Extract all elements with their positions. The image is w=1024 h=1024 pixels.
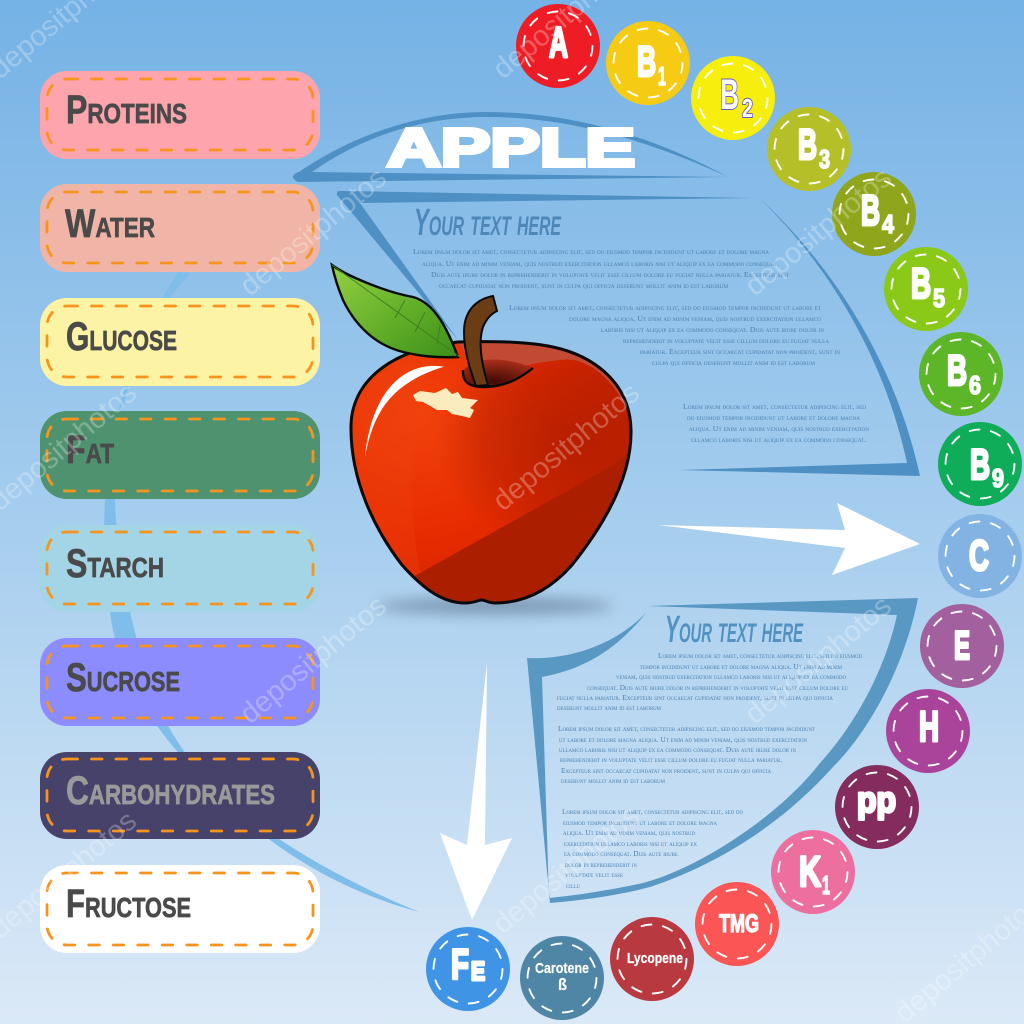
vitamin E: E [954, 624, 970, 668]
upper panel text 3 [683, 402, 869, 444]
upper panel text 2: Lorem ipsum dolor sit amet, consectetur adipiscing elit, sed do eiusmod tempor incididunt ut labore et [509, 303, 821, 312]
apple highlight [365, 366, 445, 457]
label: water [40, 184, 320, 272]
vitamin B3 [767, 107, 851, 191]
vitamin E [920, 604, 1004, 688]
upper panel text 2: laboris nisi ut aliquip ex ea commodo consequat. Duis aute irure dolor in [601, 325, 824, 334]
label: sucrose [40, 638, 320, 726]
vitamin B1: 1 [658, 61, 666, 91]
upper panel text 3: aliqua. Ut enim ad minim veniam, quis nostrud exercitation [689, 424, 869, 433]
background arc behind labels [104, 272, 419, 912]
upper panel text 2: dolore magna aliqua. Ut enim ad minim veniam, quis nostrud exercitation ullamco [569, 314, 821, 323]
apple shadow [377, 598, 613, 614]
upper panel text 1 [413, 247, 789, 290]
watermarks: depositphotos [487, 800, 646, 940]
lycopene: Lycopene [627, 950, 683, 967]
apple dimple edge [463, 368, 533, 387]
mineral Fe [426, 927, 510, 1011]
lower panel text 2: deserunt mollit anim id est laborum [561, 776, 666, 785]
vitamin C [938, 514, 1022, 598]
carotene beta [520, 936, 604, 1020]
vitamin B9: B [970, 441, 990, 489]
upper panel text 1: occaecat cupidatat non proident, sunt in culpa qui officia deserunt mollit anim id est laborum [439, 281, 729, 290]
vitamin B2 [691, 56, 775, 140]
vitamin B4: B [861, 187, 880, 235]
vitamin PP [835, 765, 919, 849]
watermarks: depositphotos [487, 377, 646, 517]
label: starch: Starch [66, 542, 164, 586]
apple glare [413, 388, 478, 418]
lower panel text 1: consequat. Duis aute irure dolor in reprehenderit in voluptate velit esse cillum dolore eu [587, 683, 848, 692]
label: fat [40, 411, 320, 499]
upper panel text 2: reprehenderit in voluptate velit esse cillum dolore eu fugiat nulla [623, 336, 829, 345]
vitamin B3: B [798, 121, 817, 169]
upper panel text 1: Duis aute irure dolor in reprehenderit in voluptate velit esse cillum dolore eu fugiat nulla pariatur. Excepteur sint [431, 270, 789, 279]
lower panel text 1: tempor incididunt ut labore et dolore magna aliqua. Ut enim ad minim [640, 662, 843, 671]
vitamin B2: 2 [742, 93, 753, 123]
label: starch [40, 525, 320, 612]
lower panel text 3: eiusmod tempor incididunt ut labore et dolore magna [563, 818, 717, 827]
lower panel text 3: aliqua. Ut enim ad minim veniam, quis nostrud [563, 828, 695, 837]
vitamin B1: B [637, 38, 656, 86]
lower panel text 3 [562, 807, 743, 890]
TMG: TMG [719, 910, 759, 938]
watermarks: depositphotos [234, 162, 393, 302]
lower panel text 2: ullamco laboris nisi ut aliquip ex ea commodo consequat. Duis aute irure dolor in [559, 745, 796, 754]
lower panel text 3: voluptate velit esse [565, 870, 623, 879]
upper panel text 2: culpa qui officia deserunt mollit anim id est laborum [652, 358, 816, 367]
upper panel text 2 [509, 303, 840, 367]
vitamin B9 [938, 422, 1022, 506]
label: sucrose: Sucrose [66, 656, 180, 700]
lower panel text 1 [557, 651, 862, 712]
watermarks: depositphotos [234, 590, 393, 730]
title: APPLE [387, 118, 635, 178]
vitamin B6: 6 [969, 370, 981, 400]
vitamin K1: 1 [822, 870, 830, 900]
lower panel text 2: reprehenderit in voluptate velit esse cillum dolore eu fugiat nulla pariatur. [560, 755, 782, 764]
vitamin A [516, 4, 600, 88]
label: proteins: Proteins [66, 88, 187, 132]
vitamin B4: 4 [882, 209, 894, 239]
label: fat: Fat [66, 428, 114, 472]
vitamin B5: B [911, 260, 931, 308]
lower panel text 2: Lorem ipsum dolor sit amet, consectetur adipiscing elit, sed do eiusmod tempor incididunt [558, 724, 815, 733]
vitamin B6 [919, 332, 1003, 416]
label: fructose: Fructose [66, 882, 191, 926]
vitamin B1 [606, 21, 690, 105]
vitamin B2: B [720, 71, 739, 119]
lower text panel frame [527, 598, 918, 903]
lycopene [610, 917, 694, 1001]
label: water: Water [65, 202, 155, 246]
vitamin B4 [832, 172, 916, 256]
upper panel text 3: ullamco laboris nisi ut aliquip ex ea commodo consequat. [691, 435, 866, 444]
label: carbohydrates [40, 752, 320, 839]
apple dimple [463, 359, 533, 387]
lower panel text 3: cillu [566, 881, 580, 890]
title frame [292, 112, 728, 182]
arrow: right to vitamins [658, 503, 920, 575]
upper panel heading: Your text here [414, 202, 562, 244]
apple stem [464, 296, 497, 386]
lower panel text 3: ea commodo consequat. Duis aute irure [564, 849, 678, 858]
watermarks: depositphotos [739, 590, 898, 730]
upper text panel frame [337, 191, 920, 476]
icon: apple [332, 265, 665, 614]
lower panel heading: Your text here [665, 609, 804, 651]
lower panel text 2: ut labore et dolore magna aliqua. Ut enim ad minim veniam, quis nostrud exercitation [559, 735, 807, 744]
vitamin H [886, 689, 970, 773]
lower panel text 3: dolor in reprehenderit in [565, 860, 637, 869]
mineral Fe: F [451, 941, 469, 989]
upper panel text 3: Lorem ipsum dolor sit amet, consectetur adipiscing elit, sed [683, 402, 866, 411]
apple body [352, 343, 630, 602]
lower panel text 1: fugiat nulla pariatur. Excepteur sint occaecat cupidatat non proident, sunt in culpa qui officia [557, 693, 833, 702]
vitamin H: H [919, 703, 939, 751]
vitamin K1 [771, 830, 855, 914]
arrow: down to minerals [440, 663, 512, 920]
vitamin B9: 9 [992, 463, 1004, 493]
vitamin PP: pp [857, 779, 896, 820]
lower panel text 3: Lorem ipsum dolor sit amet, consectetur adipiscing elit, sed do [562, 807, 743, 816]
carotene beta: ß [558, 975, 567, 994]
lower panel text 1: veniam, quis nostrud exercitation ullamco laboris nisi ut aliquip ex ea commodo [616, 672, 846, 681]
lower panel text 3: exercitation ullamco laboris nisi ut aliquip ex [564, 839, 697, 848]
vitamin B3: 3 [819, 144, 830, 174]
mineral Fe: E [471, 956, 485, 986]
vitamin B5 [884, 247, 968, 331]
lower panel text 1: Lorem ipsum dolor sit amet, consectetur adipiscing elit, sed do eiusmod [658, 651, 862, 660]
upper panel text 2: pariatur. Excepteur sint occaecat cupidatat non proident, sunt in [640, 347, 840, 356]
leaf [332, 265, 460, 357]
lower panel text 2: Excepteur sint occaecat cupidatat non proident, sunt in culpa qui officia [561, 766, 771, 775]
upper panel text 3: do eiusmod tempor incididunt ut labore et dolore magna [687, 413, 860, 422]
vitamin C: C [969, 532, 989, 580]
label: glucose [40, 298, 320, 386]
vitamin A: A [549, 19, 568, 67]
lower panel text 2 [558, 724, 815, 785]
label: proteins [40, 71, 320, 159]
label: fructose [40, 865, 320, 953]
label: carbohydrates: Carbohydrates [66, 769, 275, 813]
watermarks: depositphotos [739, 162, 898, 302]
carotene beta: Carotene [535, 960, 589, 977]
lower panel text 1: deserunt mollit anim id est laborum [557, 703, 662, 712]
vitamin K1: K [799, 848, 821, 896]
vitamin B5: 5 [933, 283, 945, 313]
label: glucose: Glucose [66, 315, 177, 359]
upper panel text 1: Lorem ipsum dolor sit amet, consectetur adipiscing elit, sed do eiusmod tempor incididunt ut labore et dolore magna [413, 247, 769, 256]
TMG [695, 882, 779, 966]
vitamin B6: B [947, 347, 967, 395]
upper panel text 1: aliqua. Ut enim ad minim veniam, quis nostrud exercitation ullamco laboris nisi ut aliquip ex ea commodo consequat. [422, 259, 779, 268]
